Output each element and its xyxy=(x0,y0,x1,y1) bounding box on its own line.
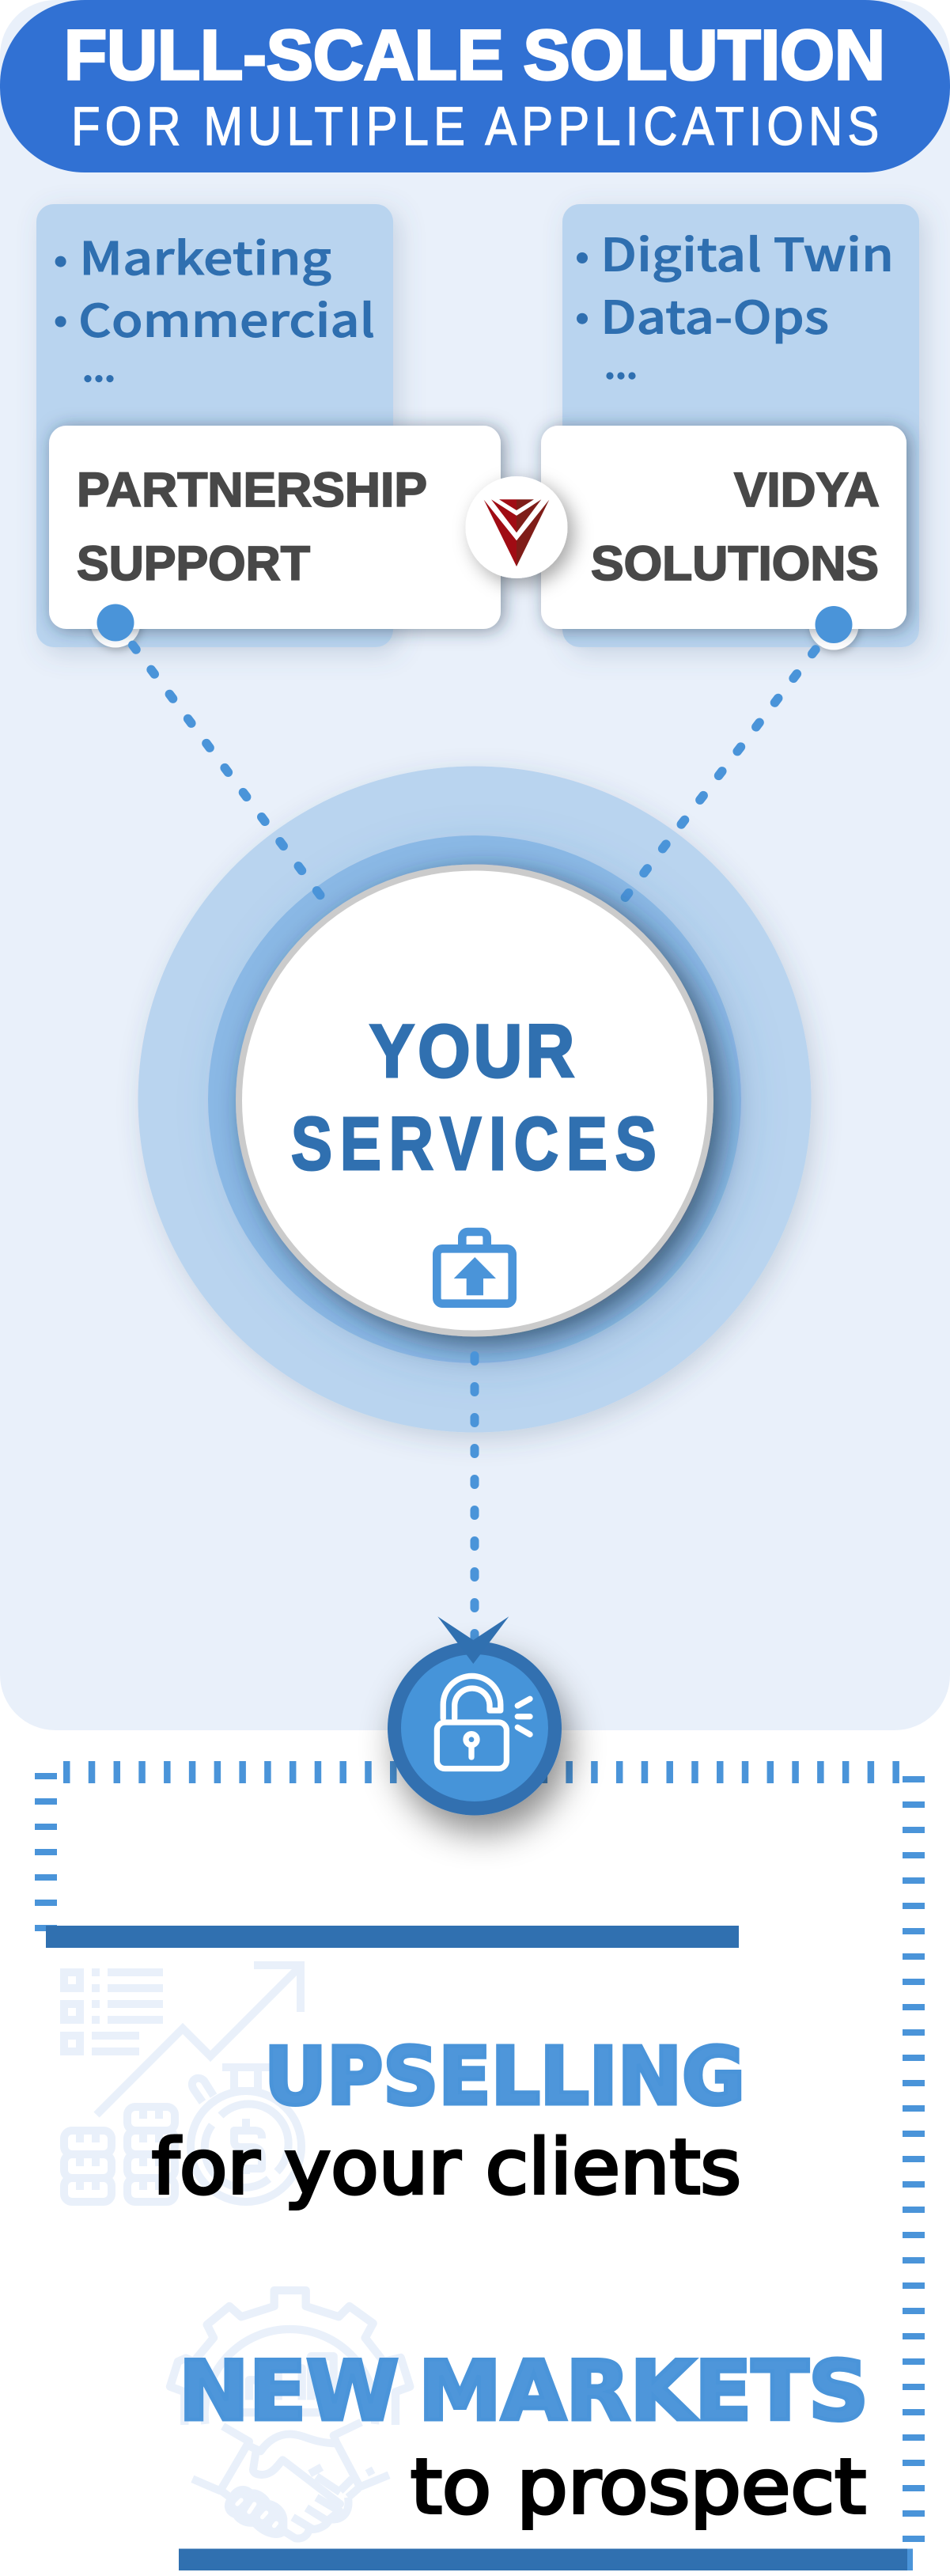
icon: vidya logo xyxy=(465,476,568,578)
panel: right application list xyxy=(562,204,919,647)
accent bar: top xyxy=(46,1926,739,1948)
right list background xyxy=(562,204,919,647)
stopwatch xyxy=(191,2067,301,2202)
label line 2: SERVICES xyxy=(291,1102,657,1186)
icon: briefcase with up arrow xyxy=(437,1232,513,1304)
heading: new markets xyxy=(179,2344,869,2439)
word: new: NEW xyxy=(179,2344,399,2439)
title line 1: FULL-SCALE SOLUTION xyxy=(64,15,885,94)
heading: upselling: UPSELLING xyxy=(264,2030,745,2123)
dotted connector: left card to services xyxy=(133,645,323,899)
accent bar: bottom xyxy=(179,2549,913,2570)
checklist xyxy=(60,1968,163,2055)
card background xyxy=(541,426,906,629)
dashed frame: right side xyxy=(903,1776,925,2543)
banner pill xyxy=(0,0,950,172)
dashed frame: top ticks xyxy=(63,1761,899,1783)
middle ring xyxy=(208,835,741,1363)
badge inner disc xyxy=(401,1654,548,1801)
left list background xyxy=(36,204,393,647)
title line 2: FOR MULTIPLE APPLICATIONS xyxy=(71,95,879,157)
card: partnership support xyxy=(49,426,501,629)
logo disc xyxy=(465,476,568,578)
icon: growth chart with coins and stopwatch xyxy=(60,1965,301,2202)
list item: Data-Ops: Data-Ops xyxy=(600,282,829,347)
ellipsis xyxy=(84,375,114,382)
card: vidya solutions xyxy=(541,426,906,629)
bullet xyxy=(55,256,66,267)
card background xyxy=(49,426,501,629)
logo chevrons xyxy=(484,499,549,566)
badge outer disc xyxy=(388,1641,562,1815)
anchor dot: left xyxy=(97,604,134,641)
panel: light blue background xyxy=(0,0,950,1730)
icon: unlock badge xyxy=(388,1616,562,1815)
card label line 1: VIDYA xyxy=(734,463,880,517)
dotted connector: services to unlock xyxy=(470,1356,479,1639)
card label line 2: SUPPORT xyxy=(77,536,310,590)
word: markets: MARKETS xyxy=(418,2344,869,2439)
subheading: for your clients: for your clients xyxy=(152,2124,741,2211)
list item: Commercial: Commercial xyxy=(78,285,375,350)
list item: Marketing: Marketing xyxy=(79,223,331,288)
dotted connector: right card to services xyxy=(625,650,816,898)
padlock xyxy=(437,1676,530,1769)
subheading: to prospect: to prospect xyxy=(411,2444,866,2531)
connector dots: card anchors xyxy=(90,598,859,650)
gear outline xyxy=(170,2290,410,2425)
bullet xyxy=(577,313,588,324)
centre circle: your services xyxy=(239,867,710,1334)
icon: gear with handshake xyxy=(170,2290,410,2539)
list item: Digital Twin: Digital Twin xyxy=(600,220,894,285)
coin stacks xyxy=(64,2107,175,2202)
dashed frame: left side xyxy=(35,1773,57,1931)
card label line 2: SOLUTIONS xyxy=(591,536,879,590)
ellipsis xyxy=(606,372,636,380)
anchor dot: right xyxy=(815,606,853,643)
card label line 1: PARTNERSHIP xyxy=(77,463,427,517)
label line 1: YOUR xyxy=(369,1010,574,1093)
arrowhead xyxy=(437,1616,509,1664)
outer ring xyxy=(138,766,812,1432)
panel: left application list xyxy=(36,204,393,647)
bullet xyxy=(55,316,66,328)
white disc xyxy=(239,867,710,1334)
handshake xyxy=(192,2423,389,2539)
header banner xyxy=(0,0,950,172)
trend arrow xyxy=(97,1965,301,2115)
bullet xyxy=(577,252,588,263)
